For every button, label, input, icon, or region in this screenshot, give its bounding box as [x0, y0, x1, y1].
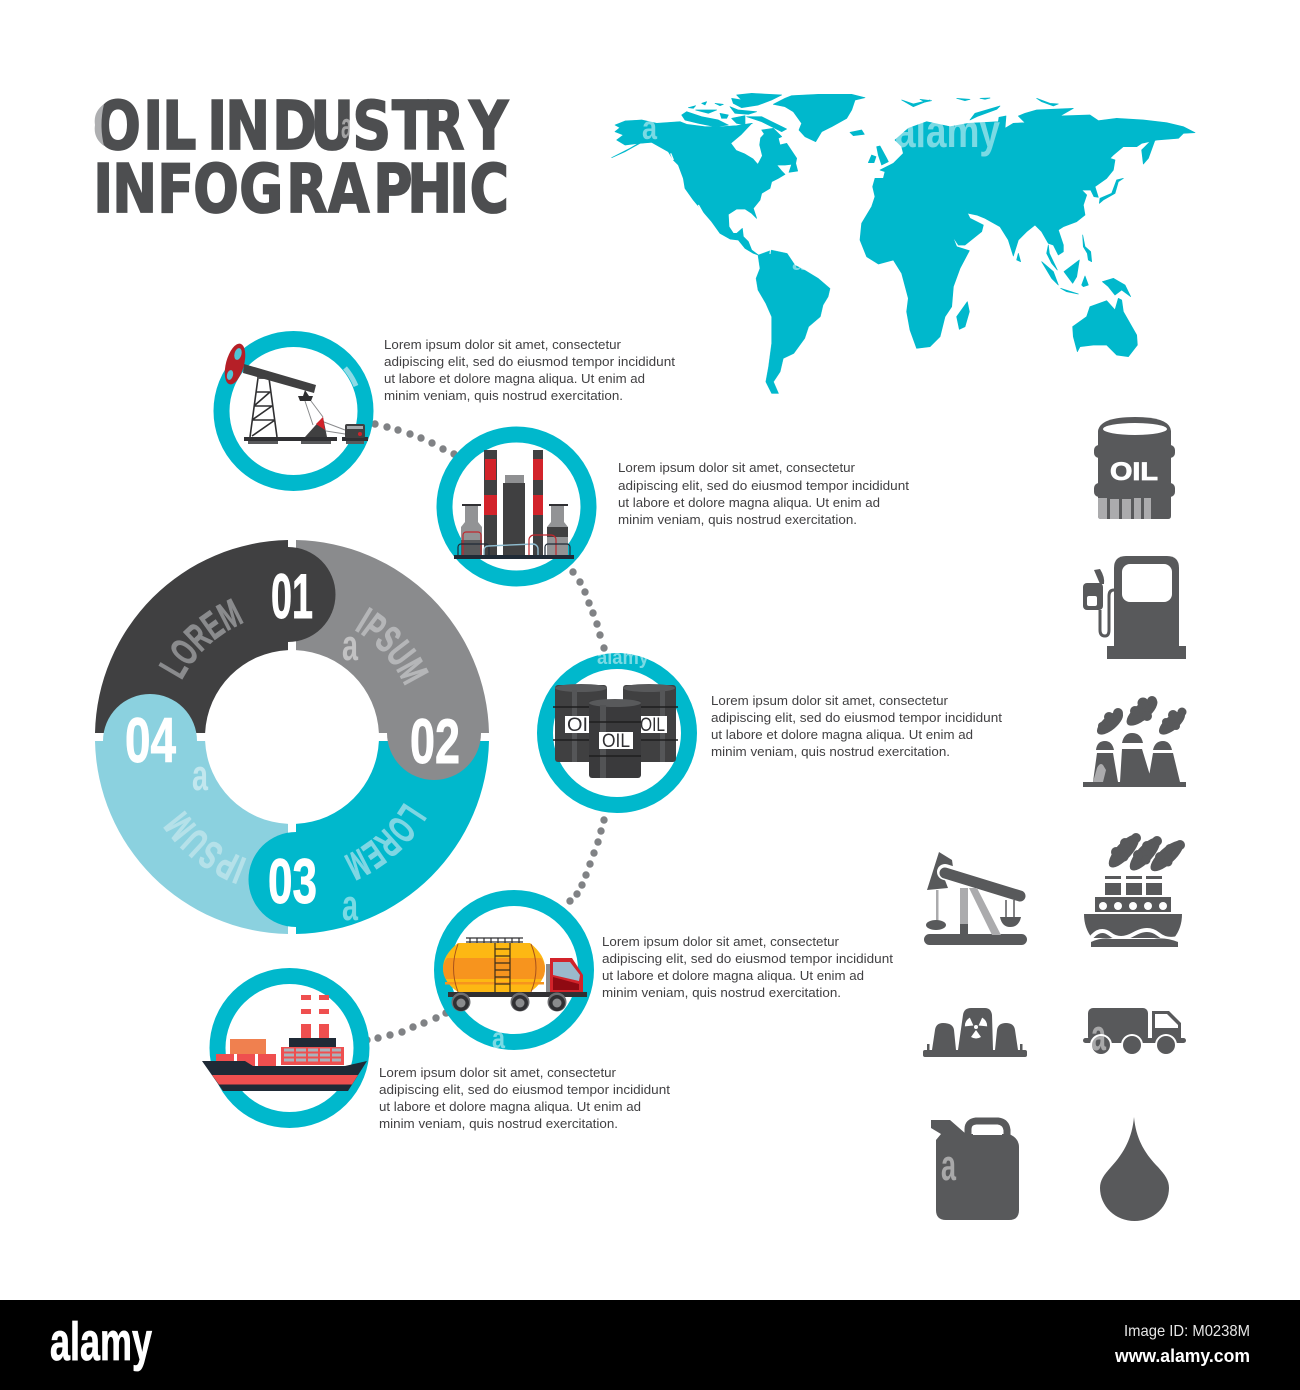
map watermark: a [642, 109, 658, 146]
label lorem bottom: LOREM [344, 803, 427, 881]
text block 3 [711, 693, 1002, 759]
text block 4: ut labore et dolore magna aliqua. Ut enim ad [602, 968, 864, 983]
circle: pump jack [221, 339, 368, 483]
icon: pump jack silhouette [924, 852, 1027, 945]
icon: oil barrel: OIL [1110, 458, 1158, 486]
tanker truck icon [443, 938, 587, 1012]
icon: jerry can [931, 1120, 1019, 1220]
segment 02 [296, 540, 489, 733]
ring watermarks: a [342, 621, 358, 670]
label lorem top: LOREM [158, 598, 244, 680]
text block 4: adipiscing elit, sed do eiusmod tempor incididunt [602, 951, 893, 966]
ring watermarks [192, 621, 358, 930]
cargo ship icon [202, 995, 367, 1091]
text block 4: Lorem ipsum dolor sit amet, consectetur [602, 934, 840, 949]
label ipsum right: IPSUM [355, 607, 429, 686]
head 03 [249, 832, 296, 927]
head 01 [288, 547, 336, 642]
circle: tanker truck [442, 898, 587, 1055]
text block 5: Lorem ipsum dolor sit amet, consectetur [379, 1065, 617, 1080]
footer bar [0, 1300, 1300, 1390]
text block 3: adipiscing elit, sed do eiusmod tempor incididunt [711, 710, 1002, 725]
icon: oil barrel [1094, 417, 1175, 519]
text block 5 [379, 1065, 670, 1131]
icon: smoking ship [1084, 830, 1188, 947]
eurasia africa and oceania [860, 98, 1195, 357]
icon: factory smoke [1083, 694, 1189, 787]
barrels icon [553, 684, 678, 778]
ring watermarks: a [192, 751, 208, 800]
text block 1: minim veniam, quis nostrud exercitation. [384, 388, 623, 403]
text block 2: minim veniam, quis nostrud exercitation. [618, 512, 857, 527]
text block 2: ut labore et dolore magna aliqua. Ut enim ad [618, 495, 880, 510]
head 04 [103, 694, 197, 741]
text block 1 [384, 337, 675, 403]
smoke [1093, 694, 1189, 739]
text block 5: ut labore et dolore magna aliqua. Ut enim ad [379, 1099, 641, 1114]
number 02: 02 [410, 707, 460, 777]
label ipsum left: IPSUM [163, 810, 246, 884]
south america [756, 250, 830, 393]
circle: refinery [444, 434, 588, 578]
title [93, 88, 509, 229]
map watermark: alamy [895, 105, 1000, 157]
icon: delivery truck: a [1091, 1011, 1106, 1060]
world map [612, 93, 1195, 393]
barrels icon: OIL [602, 731, 630, 752]
icon: nuclear plant [923, 1008, 1027, 1057]
refinery icon [454, 450, 574, 559]
number 04: 04 [125, 706, 176, 776]
barrels icon: OI [567, 715, 588, 736]
text block 4 [602, 934, 893, 1000]
text block 3: ut labore et dolore magna aliqua. Ut enim ad [711, 727, 973, 742]
title: a [341, 105, 353, 146]
title: INFOGRAPHIC [93, 151, 509, 229]
title: OIL INDUSTRY [95, 88, 509, 166]
map watermark [642, 105, 1000, 275]
text block 4: minim veniam, quis nostrud exercitation. [602, 985, 841, 1000]
pump jack icon [221, 341, 368, 444]
alamy logo: alamy [50, 1312, 152, 1372]
segment 04 [95, 741, 288, 934]
ring chart [95, 540, 489, 934]
circle: tanker truck: a [492, 1022, 505, 1055]
circle: barrels [545, 647, 689, 805]
text block 1: Lorem ipsum dolor sit amet, consectetur [384, 337, 622, 352]
text block 2 [618, 460, 909, 527]
text block 3: Lorem ipsum dolor sit amet, consectetur [711, 693, 949, 708]
text block 1: ut labore et dolore magna aliqua. Ut enim ad [384, 371, 645, 386]
circle: barrels: alamy [597, 647, 650, 669]
dotted connectors [363, 420, 608, 1044]
number 03: 03 [268, 847, 317, 917]
head 02 [387, 733, 481, 780]
icon: jerry can: a [941, 1141, 956, 1190]
image id: Image ID: M0238M [1124, 1323, 1250, 1340]
circle: cargo ship [202, 976, 367, 1120]
map watermark: a [792, 253, 806, 275]
text block 2: Lorem ipsum dolor sit amet, consectetur [618, 460, 856, 475]
text block 5: adipiscing elit, sed do eiusmod tempor incididunt [379, 1082, 670, 1097]
number 01: 01 [271, 562, 313, 632]
text block 3: minim veniam, quis nostrud exercitation. [711, 744, 950, 759]
text block 1: adipiscing elit, sed do eiusmod tempor incididunt [384, 354, 675, 369]
text block 2: adipiscing elit, sed do eiusmod tempor incididunt [618, 478, 909, 493]
smoke [1104, 830, 1188, 876]
segment 03 [296, 741, 489, 934]
radiation symbol [964, 1017, 988, 1038]
website: www.alamy.com [1114, 1346, 1250, 1366]
barrels icon: OIL [640, 715, 665, 736]
icon: delivery truck [1083, 1008, 1186, 1060]
americas and greenland [612, 93, 865, 255]
icon: fuel pump [1083, 556, 1186, 659]
segment 01 [95, 540, 288, 733]
text block 5: minim veniam, quis nostrud exercitation. [379, 1116, 618, 1131]
ring watermarks: a [342, 881, 358, 930]
icon: oil drop [1100, 1117, 1169, 1221]
